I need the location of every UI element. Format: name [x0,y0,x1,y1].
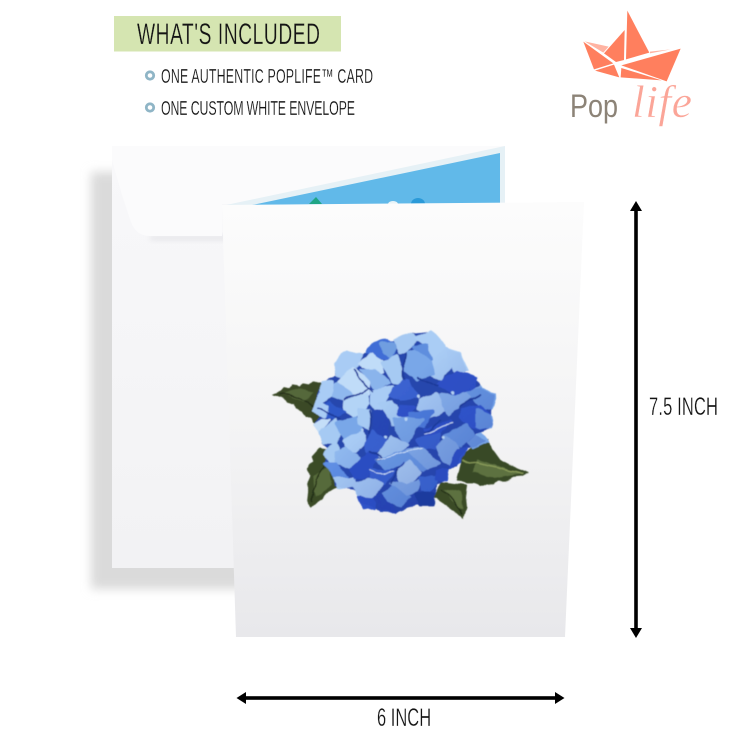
shading over lower right of the bloom [313,332,495,512]
petal veins [368,423,452,473]
petal creases [318,353,480,483]
label: 6 inch: 6 INCH [377,705,431,732]
list: included items: ONE CUSTOM WHITE ENVELOPE [161,97,355,120]
logo: Poplife paper boat: Pop [570,88,618,124]
panel: what's included heading: WHAT'S INCLUDED [137,18,320,51]
panel: greeting card front [222,202,584,637]
flower head [313,332,496,512]
list: included items: ONE AUTHENTIC POPLIFE™ CARD [161,65,373,88]
leaves [273,382,529,519]
label: 7.5 inch: 7.5 INCH [649,394,718,421]
arrow: card height [630,201,642,638]
illustration: blue hydrangea [273,332,529,519]
list: included items [146,65,373,120]
logo: Poplife paper boat: life [632,76,692,127]
flower centres [360,391,453,439]
envelope drop shadow [91,172,251,589]
logo: Poplife paper boat [570,11,692,127]
card inside peeking out of envelope [226,146,505,210]
arrow: card width [236,692,564,704]
panel: white envelope [112,146,505,568]
